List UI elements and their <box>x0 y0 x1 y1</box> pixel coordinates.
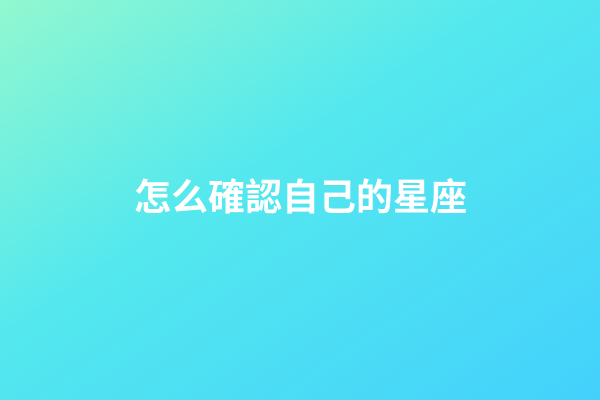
title: 怎么確認自己的星座 <box>134 177 467 218</box>
